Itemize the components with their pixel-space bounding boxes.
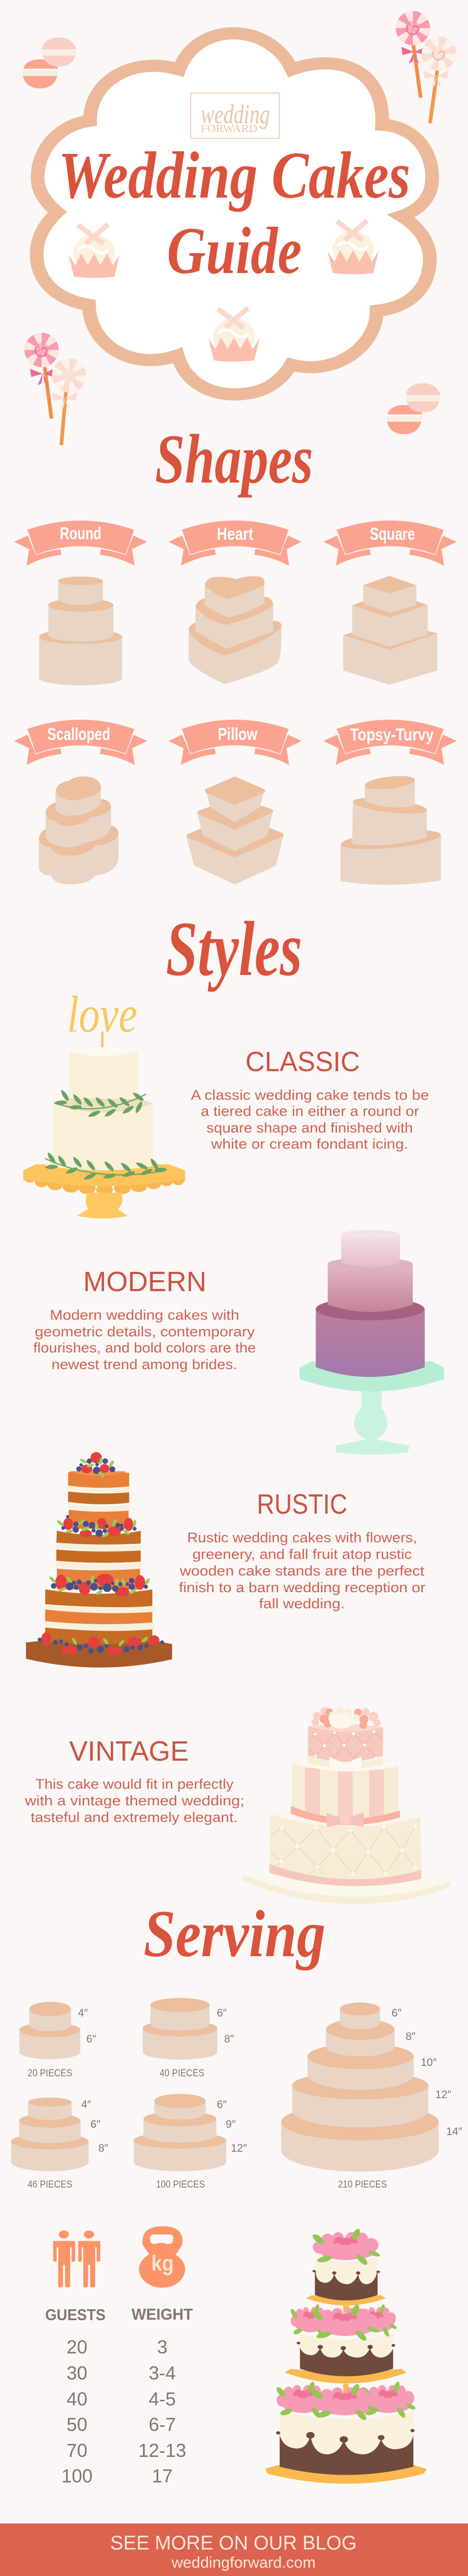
classic text bbox=[191, 1046, 429, 1152]
modern text: newest trend among brides. bbox=[51, 1357, 237, 1372]
cake: topsy-turvy bbox=[340, 774, 441, 885]
top tier bbox=[306, 2257, 386, 2306]
serving cake: 210 pieces: 8″ bbox=[406, 2031, 416, 2042]
table: guests and weight bbox=[45, 2305, 193, 2487]
heading: shapes: Shapes bbox=[155, 421, 313, 498]
modern text: Modern wedding cakes with bbox=[50, 1307, 239, 1323]
vintage text: tasteful and extremely elegant. bbox=[31, 1810, 238, 1825]
ribbon: scalloped bbox=[14, 720, 147, 765]
decoration: lollipops top right bbox=[396, 11, 456, 123]
serving cake: 210 pieces: 12″ bbox=[435, 2089, 451, 2101]
ribbon: square: Square bbox=[370, 524, 415, 543]
heading: serving: Serving bbox=[144, 1897, 326, 1971]
cake: scalloped bbox=[39, 776, 119, 884]
cake board bbox=[26, 1640, 172, 1668]
ribbon: topsy-turvy: Topsy-Turvy bbox=[350, 725, 434, 744]
serving cake: 46 pieces: 6″ bbox=[90, 2118, 101, 2130]
rustic text: greenery, and fall fruit atop rustic bbox=[192, 1546, 412, 1562]
serving cake: 100 pieces: 100 PIECES bbox=[156, 2179, 205, 2190]
serving cake: 210 pieces: 14″ bbox=[446, 2126, 462, 2138]
classic text: white or cream fondant icing. bbox=[211, 1136, 408, 1152]
table: guests and weight: 6-7 bbox=[149, 2414, 176, 2435]
table: guests and weight: 30 bbox=[67, 2362, 87, 2384]
serving cake: 46 pieces bbox=[11, 2098, 109, 2190]
ribbon: scalloped: Scalloped bbox=[47, 724, 110, 744]
bottom tier bbox=[269, 1811, 421, 1886]
modern text bbox=[33, 1266, 256, 1372]
table: guests and weight: 40 bbox=[67, 2388, 87, 2410]
top tier bbox=[307, 1707, 383, 1768]
ribbon: round bbox=[14, 521, 147, 566]
logo bbox=[191, 93, 279, 138]
bottom tier bbox=[265, 2411, 427, 2483]
serving cake: 210 pieces: 210 PIECES bbox=[338, 2179, 387, 2190]
table: guests and weight: 12-13 bbox=[138, 2440, 186, 2461]
modern cake illustration bbox=[300, 1230, 444, 1455]
icon: guests bbox=[53, 2231, 100, 2287]
title: Guide bbox=[167, 214, 302, 288]
flower cake illustration bbox=[265, 2228, 427, 2483]
serving cake: 210 pieces: 10″ bbox=[421, 2057, 437, 2068]
serving cake: 100 pieces: 9″ bbox=[226, 2118, 236, 2130]
serving cake: 20 pieces: 4″ bbox=[78, 2007, 88, 2019]
decoration: macarons bottom right bbox=[386, 383, 440, 434]
section: shapes bbox=[14, 421, 457, 885]
title: Wedding Cakes bbox=[58, 138, 410, 212]
classic cake illustration: love bbox=[67, 985, 137, 1043]
table: guests and weight: 3 bbox=[157, 2336, 167, 2358]
bow bbox=[327, 1812, 363, 1827]
footer bar bbox=[0, 2523, 468, 2576]
serving cake: 100 pieces: 6″ bbox=[217, 2099, 227, 2111]
classic text: A classic wedding cake tends to be bbox=[191, 1087, 429, 1103]
table: guests and weight: WEIGHT bbox=[132, 2305, 193, 2323]
ribbon: square bbox=[323, 521, 457, 566]
serving cake: 20 pieces: 6″ bbox=[86, 2033, 97, 2045]
table: guests and weight: 20 bbox=[67, 2336, 87, 2358]
vintage text bbox=[24, 1736, 244, 1825]
serving cake: 40 pieces: 40 PIECES bbox=[160, 2068, 204, 2079]
section: styles bbox=[23, 906, 451, 1904]
classic text: square shape and finished with bbox=[206, 1120, 413, 1136]
title bbox=[58, 138, 410, 288]
table: guests and weight: 17 bbox=[152, 2465, 173, 2487]
decoration: macarons top left bbox=[22, 37, 76, 88]
cake: heart bbox=[189, 576, 281, 684]
icon: weight kettlebell: kg bbox=[151, 2251, 174, 2275]
serving cake: 20 pieces bbox=[19, 2002, 97, 2079]
icon: weight kettlebell bbox=[139, 2226, 185, 2288]
middle tier bbox=[285, 2334, 407, 2384]
vintage text: VINTAGE bbox=[69, 1736, 189, 1767]
classic cake illustration bbox=[23, 985, 185, 1218]
scalloped title badge bbox=[37, 33, 432, 394]
ribbon: pillow: Pillow bbox=[218, 724, 257, 744]
decoration: lollipops bottom left bbox=[24, 333, 86, 445]
ribbon: topsy-turvy bbox=[323, 720, 457, 765]
table: guests and weight: 100 bbox=[61, 2465, 93, 2487]
modern text: flourishes, and bold colors are the bbox=[33, 1340, 256, 1356]
serving cake: 100 pieces bbox=[134, 2094, 247, 2190]
serving cake: 46 pieces: 46 PIECES bbox=[28, 2179, 72, 2190]
top flowers bbox=[311, 1707, 381, 1729]
vintage cake illustration bbox=[242, 1707, 451, 1904]
serving cake: 46 pieces: 4″ bbox=[81, 2099, 92, 2111]
rustic text: wooden cake stands are the perfect bbox=[179, 1563, 425, 1579]
table: guests and weight: GUESTS bbox=[45, 2306, 106, 2324]
logo: FORWARD bbox=[201, 122, 257, 135]
cake: round bbox=[39, 577, 122, 685]
rustic text: Rustic wedding cakes with flowers, bbox=[187, 1530, 417, 1545]
ribbon: heart: Heart bbox=[217, 524, 253, 543]
icon: cupcake bottom bbox=[209, 308, 259, 362]
serving cake: 46 pieces: 8″ bbox=[98, 2142, 109, 2154]
header section bbox=[22, 11, 456, 445]
cake stand bbox=[300, 1361, 444, 1455]
classic text: a tiered cake in either a round or bbox=[201, 1103, 419, 1119]
ribbon: heart bbox=[168, 521, 302, 566]
rustic text: fall wedding. bbox=[259, 1596, 345, 1611]
cake plate bbox=[242, 1871, 451, 1904]
rustic text: finish to a barn wedding reception or bbox=[179, 1580, 425, 1595]
modern text: MODERN bbox=[83, 1266, 206, 1297]
serving cake: 100 pieces: 12″ bbox=[231, 2142, 247, 2154]
footer call to action: SEE MORE ON OUR BLOG bbox=[110, 2532, 357, 2554]
icon: cupcake left bbox=[69, 224, 120, 278]
cake: pillow bbox=[186, 778, 283, 884]
serving cake: 40 pieces: 8″ bbox=[224, 2033, 235, 2045]
serving cake: 40 pieces: 6″ bbox=[217, 2007, 227, 2019]
table: guests and weight: 70 bbox=[67, 2440, 87, 2461]
footer url: weddingforward.com bbox=[171, 2554, 316, 2571]
rustic cake illustration bbox=[26, 1452, 172, 1668]
vintage text: with a vintage themed wedding; bbox=[24, 1793, 244, 1809]
heading: styles: Styles bbox=[166, 906, 302, 992]
table: guests and weight: 3-4 bbox=[149, 2362, 176, 2384]
table: guests and weight: 50 bbox=[67, 2414, 87, 2435]
icon: cupcake right bbox=[328, 220, 379, 275]
rustic text bbox=[179, 1489, 425, 1611]
serving cake: 210 pieces: 6″ bbox=[392, 2007, 402, 2019]
logo: wedding bbox=[201, 100, 270, 129]
ribbon: pillow bbox=[168, 720, 302, 765]
section: serving bbox=[11, 1897, 462, 2487]
modern text: geometric details, contemporary bbox=[35, 1324, 255, 1339]
berries bbox=[38, 1452, 164, 1655]
table: guests and weight: 4-5 bbox=[149, 2388, 176, 2410]
vintage text: This cake would fit in perfectly bbox=[35, 1776, 234, 1792]
classic text: CLASSIC bbox=[245, 1046, 360, 1077]
rustic text: RUSTIC bbox=[257, 1489, 347, 1520]
middle tier bbox=[291, 1762, 400, 1827]
serving cake: 40 pieces bbox=[142, 1998, 235, 2079]
serving cake: 210 pieces bbox=[281, 2002, 462, 2190]
cake: square bbox=[343, 576, 437, 685]
ribbon: round: Round bbox=[60, 524, 101, 543]
serving cake: 20 pieces: 20 PIECES bbox=[28, 2068, 72, 2079]
